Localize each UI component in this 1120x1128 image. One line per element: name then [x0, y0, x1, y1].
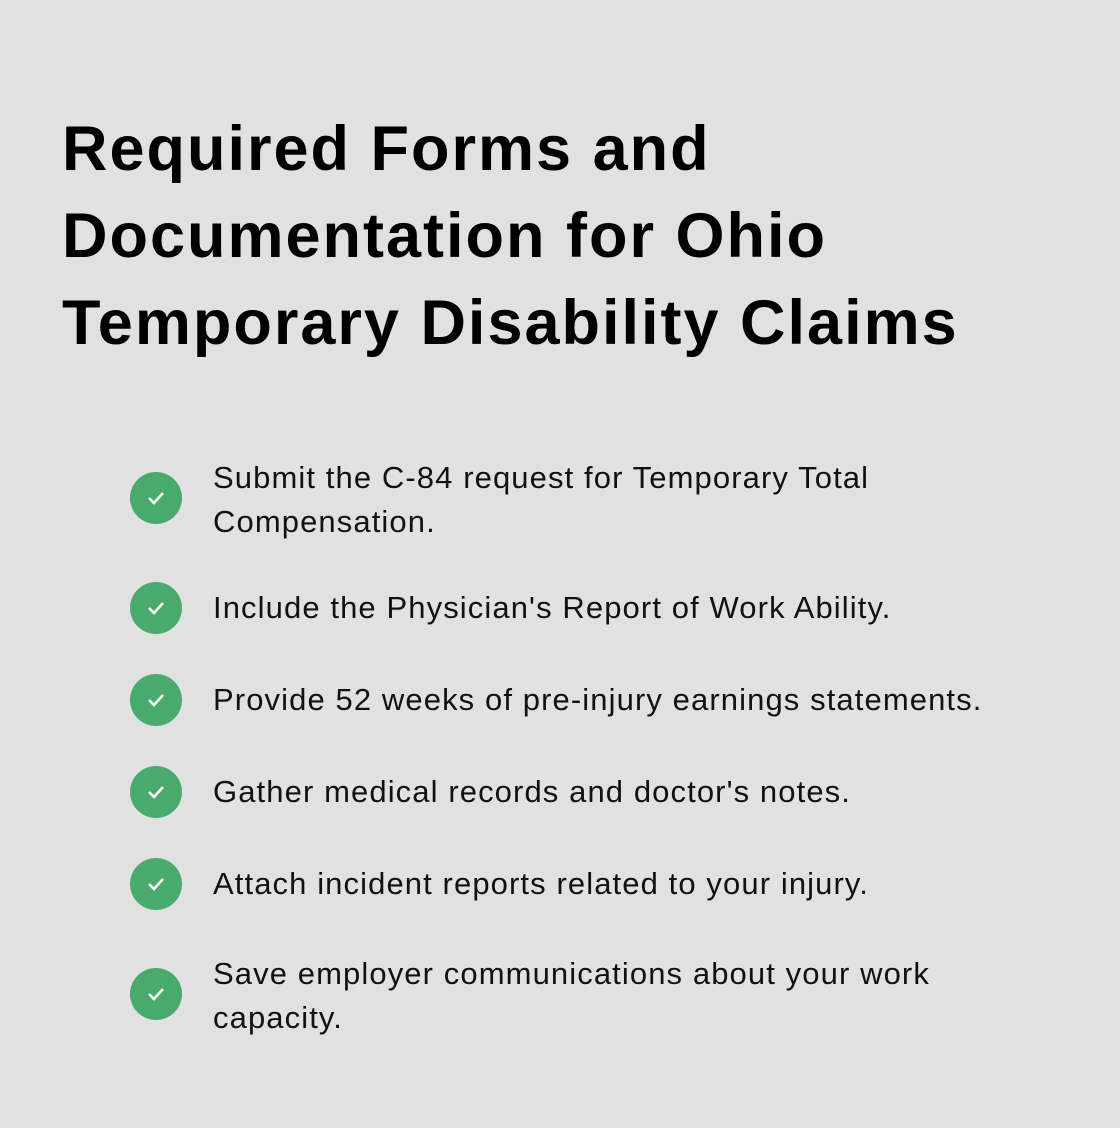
text: Attach incident reports related to your injury.	[213, 866, 869, 901]
item 2	[130, 582, 891, 634]
title: Temporary Disability Claims	[62, 288, 959, 358]
text: Include the Physician's Report of Work Ability.	[213, 590, 891, 625]
item 6	[130, 956, 930, 1035]
title	[62, 114, 959, 358]
icon: check	[130, 968, 182, 1020]
text: Save employer communications about your work capacity.	[213, 956, 930, 1035]
text: Gather medical records and doctor's notes.	[213, 774, 851, 809]
icon: check	[130, 766, 182, 818]
title: Required Forms and	[62, 114, 711, 184]
text: Provide 52 weeks of pre-injury earnings statements.	[213, 682, 982, 717]
icon: check	[130, 472, 182, 524]
title: Documentation for Ohio	[62, 201, 827, 271]
text: Submit the C-84 request for Temporary Total Compensation.	[213, 460, 869, 539]
item 4	[130, 766, 851, 818]
icon: check	[130, 582, 182, 634]
item 3	[130, 674, 982, 726]
icon: check	[130, 674, 182, 726]
icon: check	[130, 858, 182, 910]
item 5	[130, 858, 869, 910]
item 1	[130, 460, 869, 539]
